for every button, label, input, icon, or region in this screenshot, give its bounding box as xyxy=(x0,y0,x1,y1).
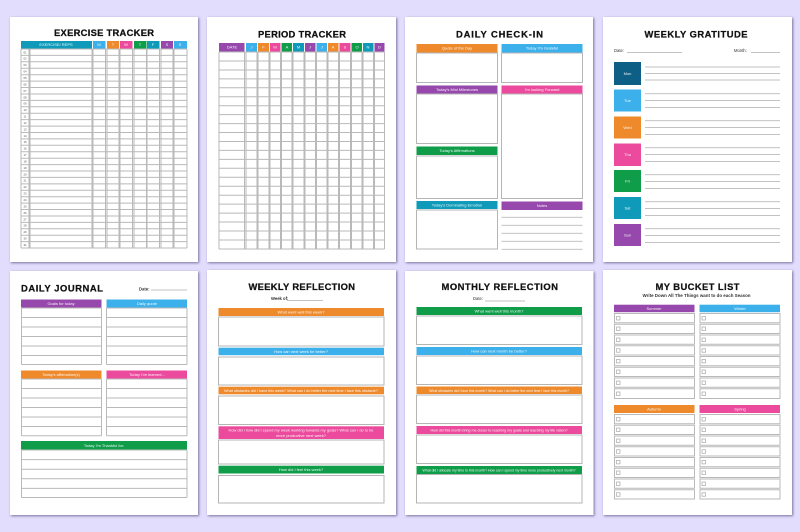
panel: exercise tracker xyxy=(10,17,198,262)
question: how can next week be better: How can next week be better? xyxy=(274,349,329,354)
week of field xyxy=(271,296,323,301)
panel: weekly gratitude xyxy=(603,17,792,262)
question: how can next week be better xyxy=(218,348,384,385)
row numbers: exercise tracker: 26 xyxy=(23,211,27,215)
day: saturday: Sat xyxy=(624,206,631,210)
section: quote of the day xyxy=(416,44,498,82)
question: what went well xyxy=(416,307,582,344)
table header: period tracker: J xyxy=(250,45,252,50)
question: how did i feel: How did I feel this week? xyxy=(279,467,324,472)
list: spring xyxy=(700,405,780,499)
table header: period tracker: J xyxy=(321,45,323,50)
day: monday xyxy=(614,62,780,85)
day: sunday xyxy=(614,224,780,246)
table header: exercise tracker: EXERCISE/ REPS xyxy=(39,42,73,47)
question: obstacles xyxy=(416,386,582,424)
date field xyxy=(473,296,525,301)
table header: period tracker: M xyxy=(297,45,300,50)
question: obstacles: What obstacles did I face this month? What can I do better the next time I face this month? xyxy=(429,388,570,393)
row numbers: exercise tracker: 24 xyxy=(23,198,27,202)
subtitle: Write Down All The Things want to do each Season xyxy=(642,293,751,298)
week of field: Week of: xyxy=(271,296,288,301)
question: next month better xyxy=(416,347,582,384)
row numbers: exercise tracker: 17 xyxy=(23,153,27,157)
day: tuesday: Tue xyxy=(624,98,632,103)
section: notes: Notes xyxy=(537,203,547,208)
section: mini milestones: Today's Mini Milestones xyxy=(436,87,478,92)
row numbers: exercise tracker: 21 xyxy=(23,179,27,183)
day: sunday: Sun xyxy=(624,232,631,238)
row numbers: exercise tracker: 06 xyxy=(23,82,27,86)
row numbers: exercise tracker: 27 xyxy=(23,217,27,221)
section: quote of the day: Quote of the Day xyxy=(442,46,472,51)
question: allocate time: What did I allocate my time to this month? How can I spend my time more productively next month? xyxy=(422,468,576,472)
table header: period tracker: D xyxy=(378,45,381,50)
question: goals this month xyxy=(416,426,582,464)
section: goals for today: Goals for today xyxy=(47,301,75,306)
row numbers: exercise tracker: 20 xyxy=(23,172,27,176)
section: today i'm grateful: Today I'm Grateful xyxy=(526,46,558,51)
table header: exercise tracker: S xyxy=(166,42,169,47)
panel: daily check-in xyxy=(405,17,593,262)
row numbers: exercise tracker: 15 xyxy=(23,140,27,144)
row numbers: exercise tracker: 22 xyxy=(23,185,27,189)
section: looking forward: I'm looking Forward xyxy=(525,87,559,92)
title: period tracker: PERIOD TRACKER xyxy=(258,28,346,39)
date field xyxy=(139,286,187,292)
date field: Date: xyxy=(473,296,483,301)
section: today i'm thankful for xyxy=(21,441,187,498)
table grid: exercise tracker xyxy=(21,49,187,248)
row numbers: exercise tracker: 11 xyxy=(24,114,27,118)
panel: weekly reflection xyxy=(207,270,396,515)
row numbers: exercise tracker: 18 xyxy=(23,160,27,164)
section: daily quote: Daily quote xyxy=(137,301,158,306)
section: today i've learned xyxy=(106,370,187,436)
table header: period tracker: A xyxy=(286,45,289,50)
row numbers: exercise tracker: 08 xyxy=(23,95,27,99)
day: thursday xyxy=(614,144,780,166)
section: today's affirmations: Today's affirmation(s) xyxy=(42,372,81,377)
table header: period tracker: N xyxy=(367,45,370,50)
section: notes xyxy=(502,202,582,249)
panel: daily journal xyxy=(10,271,198,515)
table header: period tracker: M xyxy=(273,45,277,50)
row numbers: exercise tracker: 14 xyxy=(23,134,27,138)
table header: exercise tracker: S xyxy=(179,42,182,47)
table header: period tracker: O xyxy=(355,45,359,50)
question: time spent: more productive next week? xyxy=(276,433,327,438)
question: what went well xyxy=(218,308,384,346)
table header: exercise tracker: T xyxy=(112,42,115,47)
date and month fields: Date: xyxy=(614,48,624,53)
day: thursday: Thu xyxy=(624,152,631,157)
question: time spent xyxy=(218,426,384,464)
row numbers: exercise tracker: 30 xyxy=(23,236,27,240)
row numbers: exercise tracker: 05 xyxy=(23,76,27,80)
title: weekly gratitude: WEEKLY GRATITUDE xyxy=(644,28,748,39)
section: looking forward xyxy=(502,86,582,198)
section: goals for today xyxy=(21,300,102,364)
panel: my bucket list xyxy=(603,270,792,515)
day: monday: Mon xyxy=(624,71,631,76)
table header: exercise tracker: M xyxy=(97,42,101,47)
day: friday: Fri xyxy=(625,178,630,184)
question: obstacles xyxy=(218,387,384,424)
section: today i've learned: Today I've learned... xyxy=(129,372,165,377)
table header: exercise tracker: F xyxy=(152,42,155,47)
list: winter: Winter xyxy=(734,306,746,311)
day: wednesday xyxy=(614,116,780,138)
row numbers: exercise tracker xyxy=(23,50,27,247)
row numbers: exercise tracker: 07 xyxy=(23,89,27,93)
list: autumn: Autumn xyxy=(647,406,661,412)
question: next month better: How can next month be better? xyxy=(471,348,528,354)
question: time spent: How did I how did I spend my week working towards my goals? What can I do to be xyxy=(228,428,374,432)
table header: period tracker xyxy=(219,43,384,52)
row numbers: exercise tracker: 01 xyxy=(23,50,27,54)
date and month fields: Month: xyxy=(734,48,747,53)
row numbers: exercise tracker: 23 xyxy=(23,192,27,196)
list: summer: Summer xyxy=(646,306,662,311)
list: winter xyxy=(700,305,780,398)
table header: exercise tracker xyxy=(21,41,187,49)
table header: period tracker: F xyxy=(262,45,265,50)
title: daily journal: DAILY JOURNAL xyxy=(21,283,103,294)
row numbers: exercise tracker: 04 xyxy=(23,70,27,74)
table header: exercise tracker: T xyxy=(139,42,142,47)
row numbers: exercise tracker: 10 xyxy=(23,108,27,112)
section: today i'm thankful for: Today I'm Thankful for: xyxy=(84,443,124,448)
table header: period tracker: S xyxy=(344,45,347,50)
list: spring: Spring xyxy=(734,406,746,412)
row numbers: exercise tracker: 12 xyxy=(23,121,27,125)
list: summer xyxy=(614,305,694,398)
question: what went well: What went well this week? xyxy=(278,310,325,314)
row numbers: exercise tracker: 09 xyxy=(23,102,27,106)
section: affirmations xyxy=(416,146,498,198)
table header: exercise tracker: W xyxy=(124,42,128,47)
day: saturday xyxy=(614,197,780,219)
section: daily quote xyxy=(106,300,187,364)
section: mini milestones xyxy=(416,86,498,144)
table grid: period tracker xyxy=(219,52,384,249)
day: wednesday: Wed xyxy=(623,125,632,130)
row numbers: exercise tracker: 29 xyxy=(23,230,27,234)
table header: period tracker: DATE xyxy=(227,45,238,50)
row numbers: exercise tracker: 31 xyxy=(23,243,27,247)
panel: monthly reflection xyxy=(405,271,594,515)
row numbers: exercise tracker: 03 xyxy=(23,63,27,67)
table header: period tracker: A xyxy=(332,45,335,50)
title: my bucket list: MY BUCKET LIST xyxy=(656,281,740,292)
title: weekly reflection: WEEKLY REFLECTION xyxy=(248,281,355,292)
question: obstacles: What obstacles did I have this week? What can I do better the next time I face this obstacle? xyxy=(224,388,379,393)
table header: period tracker: J xyxy=(309,45,311,50)
row numbers: exercise tracker: 19 xyxy=(23,166,27,170)
section: affirmations: Today's Affirmations xyxy=(439,148,475,153)
section: dominating emotion: Today's Dominating Emotion xyxy=(432,202,482,208)
day: friday xyxy=(614,170,780,192)
row numbers: exercise tracker: 13 xyxy=(23,127,27,131)
list: autumn xyxy=(614,405,694,499)
question: goals this month: How did this month bring me closer to reaching my goals and reaching my life vision? xyxy=(430,428,568,432)
title: monthly reflection: MONTHLY REFLECTION xyxy=(442,281,558,292)
question: how did i feel xyxy=(218,466,384,503)
section: today i'm grateful xyxy=(502,44,582,82)
question: what went well: What went well this month? xyxy=(475,308,524,314)
day: tuesday xyxy=(614,90,780,112)
section: dominating emotion xyxy=(416,201,498,249)
date field: Date: xyxy=(139,286,149,292)
question: allocate time xyxy=(416,466,582,503)
row numbers: exercise tracker: 16 xyxy=(23,147,27,151)
row numbers: exercise tracker: 25 xyxy=(23,204,27,208)
title: daily check-in: DAILY CHECK-IN xyxy=(456,28,543,40)
section: today's affirmations xyxy=(21,370,102,436)
panel: period tracker xyxy=(207,17,396,262)
date and month fields xyxy=(614,48,780,53)
title: exercise tracker: EXERCISE TRACKER xyxy=(54,27,154,38)
row numbers: exercise tracker: 28 xyxy=(23,224,27,228)
row numbers: exercise tracker: 02 xyxy=(23,57,27,61)
